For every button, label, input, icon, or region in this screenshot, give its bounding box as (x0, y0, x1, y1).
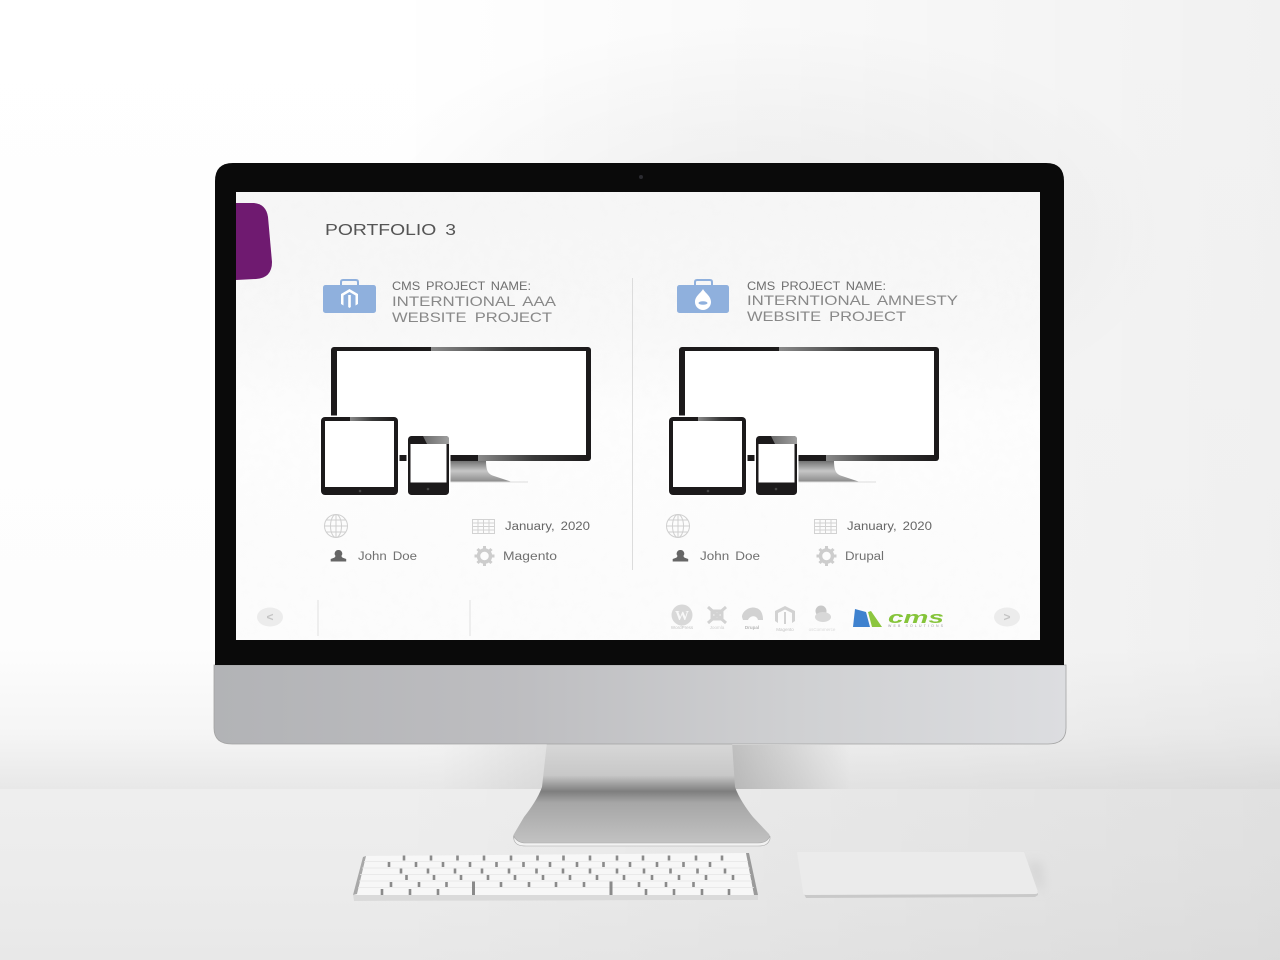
icon: joomla (708, 607, 726, 630)
next arrow (994, 608, 1020, 626)
icon: drupal (742, 608, 763, 630)
icon: drupal briefcase (677, 280, 729, 313)
screen slide (236, 192, 1040, 640)
icon: magento: Magento (776, 627, 794, 632)
author: John Doe (358, 551, 417, 563)
key gaps (382, 856, 733, 895)
icon: magento briefcase (323, 280, 376, 313)
icon: oscommerce (809, 606, 836, 632)
icon: oscommerce: osCommerce (809, 627, 836, 632)
icon: wordpress: W (675, 609, 689, 624)
background: desk (0, 789, 1280, 960)
phone (406, 434, 450, 496)
project name text (747, 281, 959, 324)
author: John Doe (700, 551, 760, 563)
desktop (679, 347, 939, 461)
project name text: CMS PROJECT NAME: (747, 281, 886, 293)
tablet (320, 416, 400, 496)
icon: calendar (472, 520, 494, 534)
desktop stand (450, 460, 512, 482)
panel: right project (666, 280, 959, 566)
logo: cms: WEB SOLUTIONS (888, 624, 944, 628)
project name text: INTERNTIONAL AAA (392, 293, 557, 309)
icon: magento (775, 606, 795, 632)
devices mockup (668, 347, 939, 496)
icon: user (673, 550, 688, 562)
previous arrow (257, 608, 283, 626)
key rows (358, 862, 754, 888)
previous arrow: < (266, 610, 274, 624)
project name text: CMS PROJECT NAME: (392, 281, 531, 293)
icon: globe (666, 514, 690, 538)
logo: cms: cms (888, 608, 944, 627)
devices mockup (320, 347, 591, 496)
background: glow behind monitor (340, 20, 1180, 440)
platform: Magento (503, 551, 557, 563)
icon: user (331, 550, 346, 562)
icon: joomla: Joomla (710, 625, 725, 630)
icon: gear (474, 546, 494, 566)
trackpad (797, 852, 1038, 898)
desktop stand (798, 460, 860, 482)
project name text: WEBSITE PROJECT (747, 308, 907, 324)
webcam (639, 175, 643, 179)
panel: left project (320, 280, 591, 566)
logo: cms (853, 608, 944, 628)
purple tab (236, 203, 272, 280)
keyboard (353, 853, 758, 901)
monitor shadow left of the stand (440, 745, 548, 789)
tablet (668, 416, 748, 496)
center divider (632, 278, 633, 570)
footer dividers (318, 600, 470, 636)
monitor stand (513, 742, 770, 843)
icon: calendar (814, 520, 836, 534)
date: January, 2020 (847, 521, 932, 533)
project name text (392, 281, 557, 325)
platform: Drupal (845, 551, 884, 563)
monitor chin (214, 665, 1066, 744)
icon: drupal: Drupal (745, 625, 759, 630)
monitor shadow right of the stand (728, 745, 850, 789)
keyboard body (353, 853, 758, 901)
slide paper texture (236, 192, 1040, 640)
stand base edge (514, 836, 770, 846)
next arrow: > (1003, 610, 1011, 624)
icon: gear (816, 546, 836, 566)
project name text: WEBSITE PROJECT (392, 309, 553, 325)
date: January, 2020 (505, 521, 590, 533)
icon: globe (324, 514, 348, 538)
desktop (331, 347, 591, 461)
icon: wordpress: WordPress (671, 625, 694, 630)
monitor bezel (215, 163, 1064, 665)
phone (754, 434, 798, 496)
title: PORTFOLIO 3 (325, 222, 456, 239)
trackpad shadow (1026, 862, 1044, 890)
slide background (236, 192, 1040, 640)
project name text: INTERNTIONAL AMNESTY (747, 292, 959, 308)
icon: wordpress (671, 604, 694, 630)
